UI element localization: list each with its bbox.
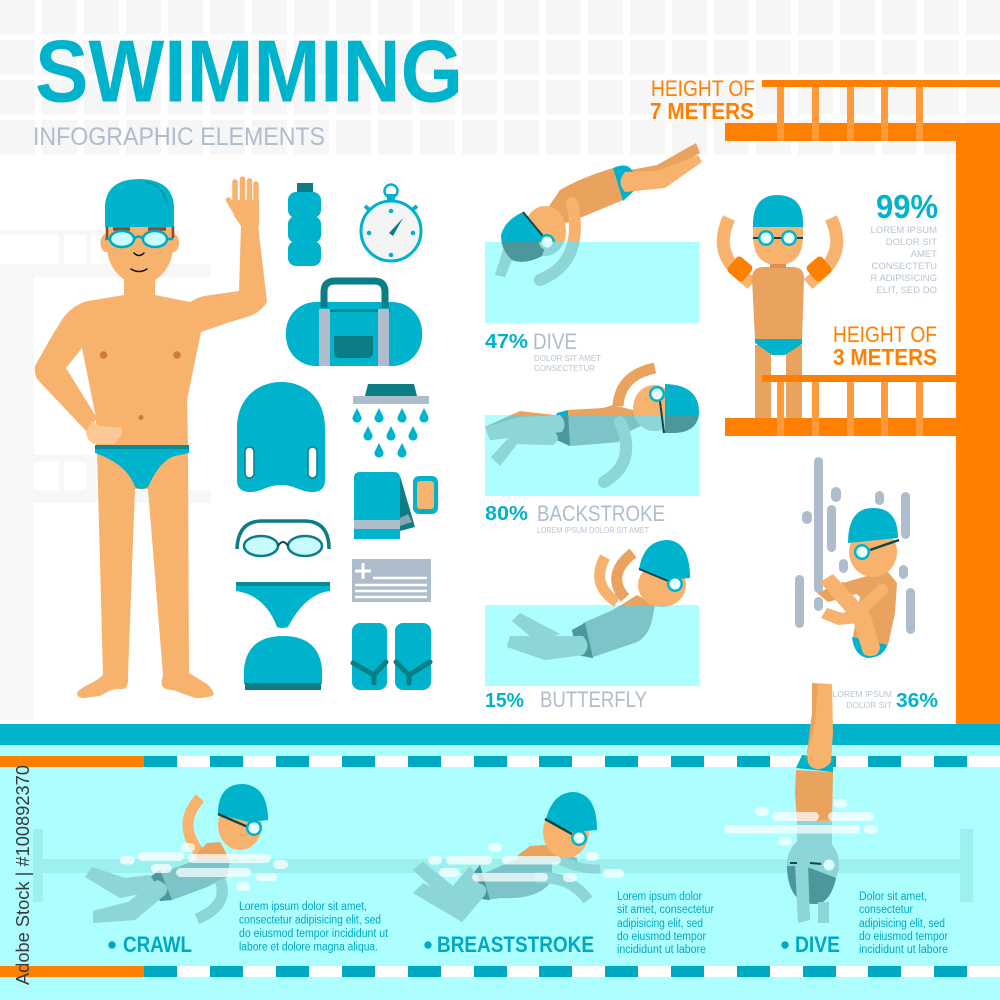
label: height of 3 meters: 3 METERS xyxy=(833,344,937,370)
icon: swim cap xyxy=(244,636,322,690)
text block: breaststroke: do eiusmod tempor xyxy=(617,931,706,943)
text block: breaststroke: incididunt ut labore xyxy=(617,944,706,956)
caption: 36% xyxy=(832,689,892,710)
water box xyxy=(485,415,699,496)
stat: 47% xyxy=(485,331,528,353)
text block: breaststroke xyxy=(617,891,714,956)
water box xyxy=(485,242,699,323)
panel: backstroke technique xyxy=(485,368,699,535)
vertical diving swimmer xyxy=(787,683,839,923)
waving hand xyxy=(228,179,259,226)
standing swimmer figure xyxy=(35,179,267,698)
text block: crawl xyxy=(239,901,389,954)
face xyxy=(849,527,897,577)
legs xyxy=(755,345,802,419)
pool ladder pole xyxy=(33,829,973,902)
text block: breaststroke: sit amet, consectetur xyxy=(617,904,714,916)
cap xyxy=(105,179,174,227)
label: height of 3 meters: HEIGHT OF xyxy=(833,322,937,347)
icon: sports bag xyxy=(286,281,422,366)
text block: lorem right column: ELIT, SED DO xyxy=(876,285,937,296)
icon: flip flops xyxy=(352,623,431,690)
text block: lorem right column: CONSECTETU xyxy=(872,261,937,272)
lane rope top xyxy=(0,756,1000,767)
label: height of 7 meters: 7 METERS xyxy=(650,98,754,124)
breaststroke splashes xyxy=(428,843,624,882)
text block: dive: adipisicing elit, sed xyxy=(859,918,945,930)
stat: 36%: 36% xyxy=(896,690,938,712)
text block: crawl: labore et dolore magna aliqua. xyxy=(239,942,378,954)
icon: kickboard xyxy=(237,382,325,492)
icon: water bottle xyxy=(288,183,321,266)
lane rope bottom xyxy=(0,966,1000,977)
body xyxy=(843,572,897,645)
head xyxy=(100,224,179,297)
text block: dive: Dolor sit amet, xyxy=(859,891,927,903)
pool edge xyxy=(0,724,1000,745)
label: height of 7 meters xyxy=(650,76,755,124)
falling swimmer with speed lines xyxy=(795,457,915,658)
text block: breaststroke: Lorem ipsum dolor xyxy=(617,891,702,903)
text block: lorem right column xyxy=(870,225,937,296)
label: dive: DIVE xyxy=(795,932,840,957)
diving tower xyxy=(725,80,1000,724)
stat: 15% xyxy=(485,690,524,712)
back arm xyxy=(817,582,860,602)
icon: swim briefs xyxy=(236,582,330,628)
panel: butterfly technique xyxy=(485,540,699,712)
text block: crawl: consectetur adipisicing elit, sed xyxy=(239,914,381,926)
tower column xyxy=(956,141,1000,724)
text block: crawl: Lorem ipsum dolor sit amet, xyxy=(239,901,367,913)
stat: 99%: 99% xyxy=(876,188,938,225)
background tile wall xyxy=(0,0,1000,155)
text block: lorem right column: AMET xyxy=(911,249,937,260)
icon: towel and soap xyxy=(354,472,438,539)
briefs xyxy=(95,446,189,489)
neck xyxy=(770,264,786,268)
briefs xyxy=(755,339,802,355)
body xyxy=(35,225,267,447)
caption: CONSECTETUR xyxy=(534,364,595,373)
subtitle: INFOGRAPHIC ELEMENTS xyxy=(33,123,325,151)
waistband xyxy=(95,445,189,449)
upper railing xyxy=(762,80,1000,141)
cap xyxy=(848,508,898,543)
chest and navel xyxy=(100,351,181,420)
diving swimmer xyxy=(495,143,702,280)
text block: crawl: do eiusmod tempor incididunt ut xyxy=(239,928,389,940)
legs xyxy=(77,450,214,698)
icon: stopwatch xyxy=(361,184,421,261)
water box xyxy=(485,605,699,686)
speed lines xyxy=(795,457,915,634)
text block: lorem right column: R ADIPISICING xyxy=(870,273,937,284)
cap xyxy=(753,195,803,227)
icon: first aid card xyxy=(352,559,431,602)
caption: LOREM IPSUM DOLOR SIT AMET xyxy=(537,526,649,535)
label: crawl: CRAWL xyxy=(123,932,192,957)
label: breaststroke: BREASTSTROKE xyxy=(437,932,594,957)
swimmer with armbands xyxy=(723,195,837,419)
goggle strap xyxy=(870,540,899,550)
goggle xyxy=(854,544,870,560)
backstroke swimmer xyxy=(485,368,699,482)
text block: lorem right column: DOLOR SIT xyxy=(886,237,937,248)
upper platform xyxy=(725,123,1000,141)
label: height of 3 meters xyxy=(833,322,937,370)
caption: DOLOR SIT AMET xyxy=(534,354,601,363)
limbs xyxy=(820,574,882,656)
armbands xyxy=(726,255,833,283)
butterfly swimmer xyxy=(507,540,690,660)
text block: lorem right column: LOREM IPSUM xyxy=(870,225,937,236)
head xyxy=(753,225,803,265)
caption xyxy=(534,354,601,373)
text block: dive xyxy=(859,891,948,956)
torso xyxy=(752,267,804,340)
caption: 36%: DOLOR SIT xyxy=(846,700,892,710)
pool water xyxy=(0,745,1000,1000)
label: BACKSTROKE xyxy=(537,501,665,526)
crawl swimmer xyxy=(85,784,268,923)
text block: dive: do eiusmod tempor xyxy=(859,931,948,943)
label: BUTTERFLY xyxy=(540,687,647,712)
label: DIVE xyxy=(533,329,577,354)
text block: breaststroke: adipisicing elit, sed xyxy=(617,918,703,930)
stat: 80% xyxy=(485,503,528,525)
stock id text: Adobe Stock | #100892370 xyxy=(12,765,33,985)
breaststroke swimmer xyxy=(413,792,600,922)
briefs xyxy=(852,637,888,658)
lower platform xyxy=(725,375,956,436)
goggles xyxy=(105,231,173,247)
icon: shower xyxy=(352,384,429,458)
label: height of 7 meters: HEIGHT OF xyxy=(651,76,755,101)
panel: dive technique xyxy=(485,143,702,373)
faint pool-wall shapes behind the swimmer xyxy=(0,230,211,720)
caption: 36%: LOREM IPSUM xyxy=(832,689,892,699)
dive splashes xyxy=(724,799,878,846)
crawl splashes xyxy=(120,843,288,891)
title: SWIMMING xyxy=(35,22,463,120)
text block: dive: incididunt ut labore xyxy=(859,944,948,956)
icon: swim goggles xyxy=(237,521,329,556)
goggles xyxy=(753,230,803,246)
resting hand xyxy=(86,421,122,444)
text block: dive: consectetur xyxy=(859,904,913,916)
label: dive xyxy=(781,932,840,957)
raised arms xyxy=(723,218,837,284)
